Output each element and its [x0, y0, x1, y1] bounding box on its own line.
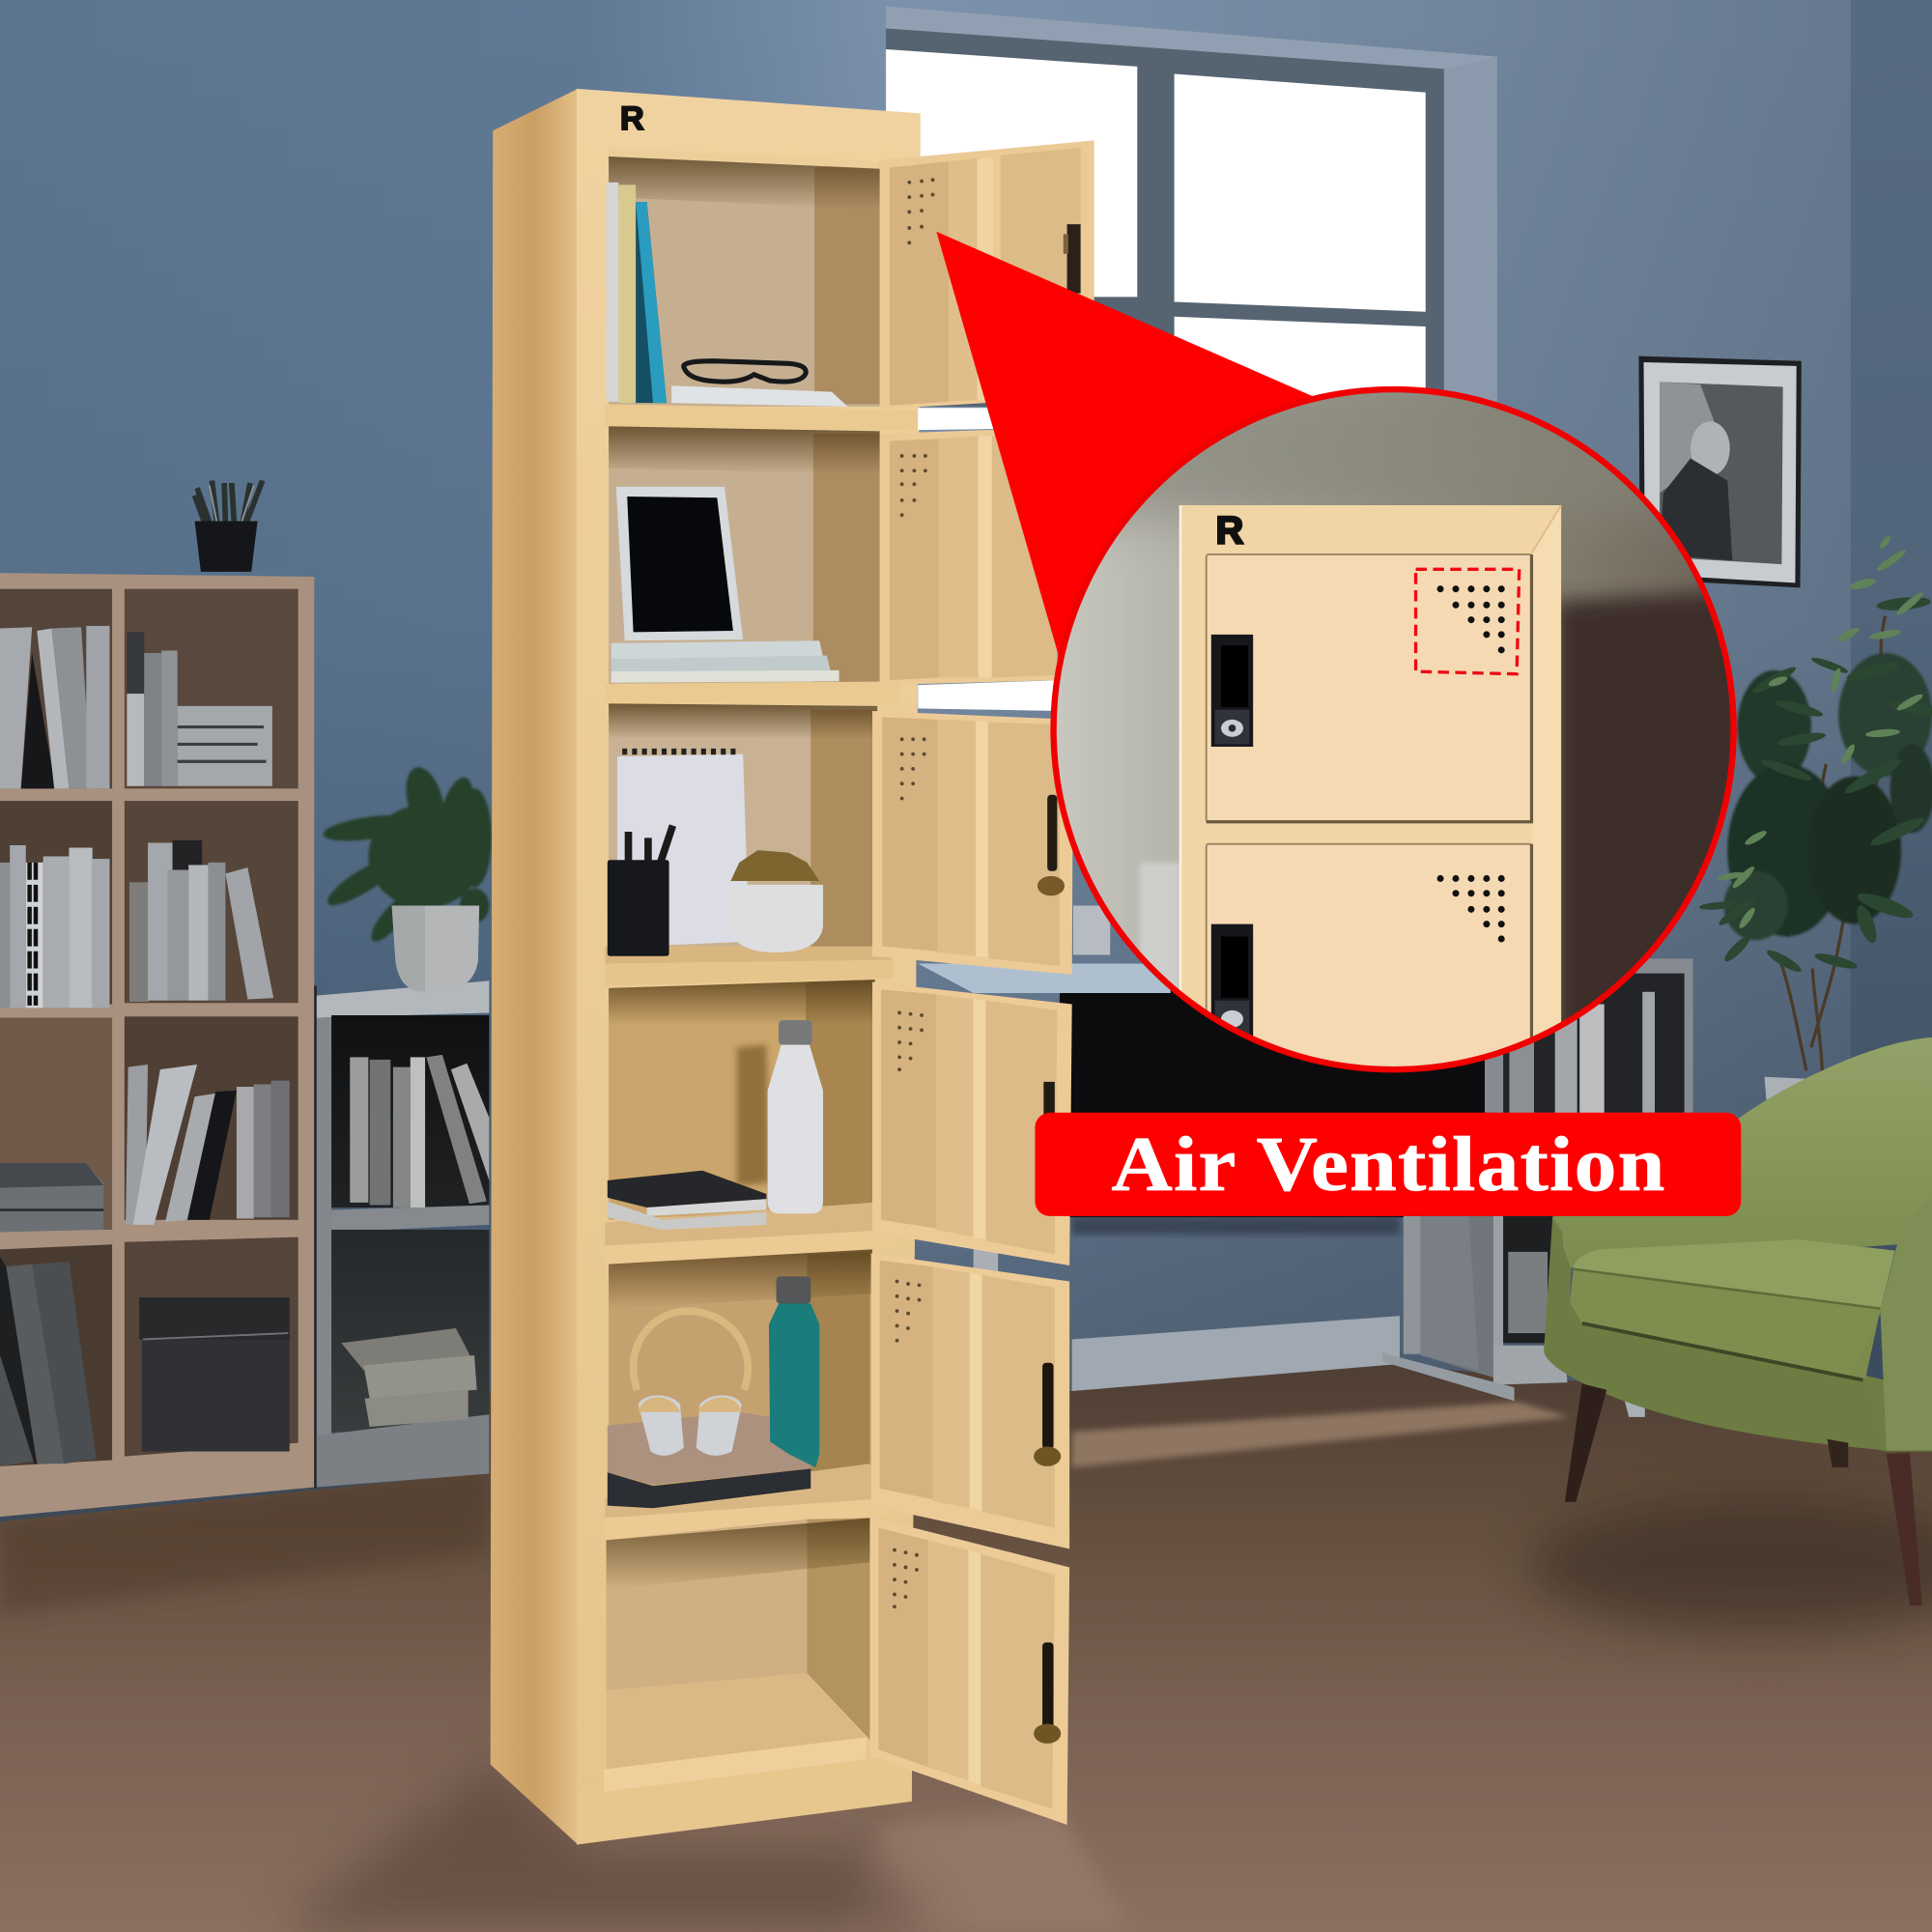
door 5: [871, 1253, 1069, 1548]
black pot with spiky plant: [195, 480, 263, 572]
compartment 5: [605, 1249, 887, 1540]
books: top-left cell: [0, 626, 272, 788]
handle 2: [1211, 924, 1253, 1047]
magnified lens: [1047, 382, 1749, 1103]
vent holes 1: [1440, 589, 1501, 650]
room background: wall: [0, 0, 1932, 1540]
lens background: [1047, 382, 1749, 1084]
door 6: [870, 1517, 1069, 1825]
back wall section, baseboard and desk: [918, 906, 1491, 1391]
magnified logo: R: [1216, 509, 1243, 552]
armchair: [1544, 1037, 1932, 1605]
plant leaves: [1699, 595, 1932, 976]
center-left potted fern: [322, 763, 492, 992]
handle 1: [1211, 635, 1253, 747]
dashed highlight box: [1416, 569, 1520, 674]
label: Air Ventilation: [1035, 1113, 1741, 1216]
books: second row: [0, 840, 273, 1008]
bright plant leaves: [1718, 534, 1925, 930]
window: [886, 6, 1497, 407]
magnified door 1: [1207, 554, 1531, 822]
books in cabinet: [350, 1055, 489, 1208]
base of locker: [577, 1754, 912, 1844]
shelf 1 items: books and glasses: [607, 183, 848, 407]
door 1: [880, 140, 1094, 409]
white gaps between doors: [918, 408, 1060, 711]
books: third row: [0, 1065, 290, 1233]
magnified locker frame: [1181, 505, 1561, 1022]
label: Air Ventilation: Air Ventilation: [1112, 1122, 1664, 1208]
locker: [491, 89, 921, 1844]
vent holes 2: [1440, 878, 1501, 939]
shelf unit behind lens: [1382, 958, 1693, 1417]
books: bottom row and box: [0, 1257, 290, 1466]
lens ring: [1054, 389, 1734, 1069]
shelf 3 items: notepad, pen cup, succulent pot: [608, 752, 823, 956]
shelf 4 items: bottle and notebooks: [608, 1020, 823, 1230]
framed picture: [1638, 356, 1802, 587]
right plant: [1699, 534, 1932, 1106]
door 3: [872, 711, 1073, 975]
logo: R: [620, 100, 644, 137]
shelf 2 items: tablet and books: [611, 487, 839, 683]
door 4: [872, 982, 1072, 1265]
compartment 3: [605, 703, 894, 985]
locker front frame: [577, 89, 921, 1844]
floor: [0, 1364, 1932, 1932]
stacked papers: [341, 1328, 477, 1427]
compartment 2: [605, 426, 899, 705]
door 2: [880, 428, 1057, 685]
locker side panel: [491, 89, 578, 1844]
red callout pointer: [936, 232, 1394, 729]
left bookcase: [0, 573, 317, 1517]
compartment 4: [605, 980, 892, 1264]
shelf 5 items: headphones, bottle, folded cloth: [608, 1276, 819, 1508]
magnified door 2: [1206, 842, 1534, 1066]
middle cabinet: [317, 980, 489, 1488]
compartment 1: [605, 148, 918, 431]
compartment 6: [604, 1518, 870, 1792]
